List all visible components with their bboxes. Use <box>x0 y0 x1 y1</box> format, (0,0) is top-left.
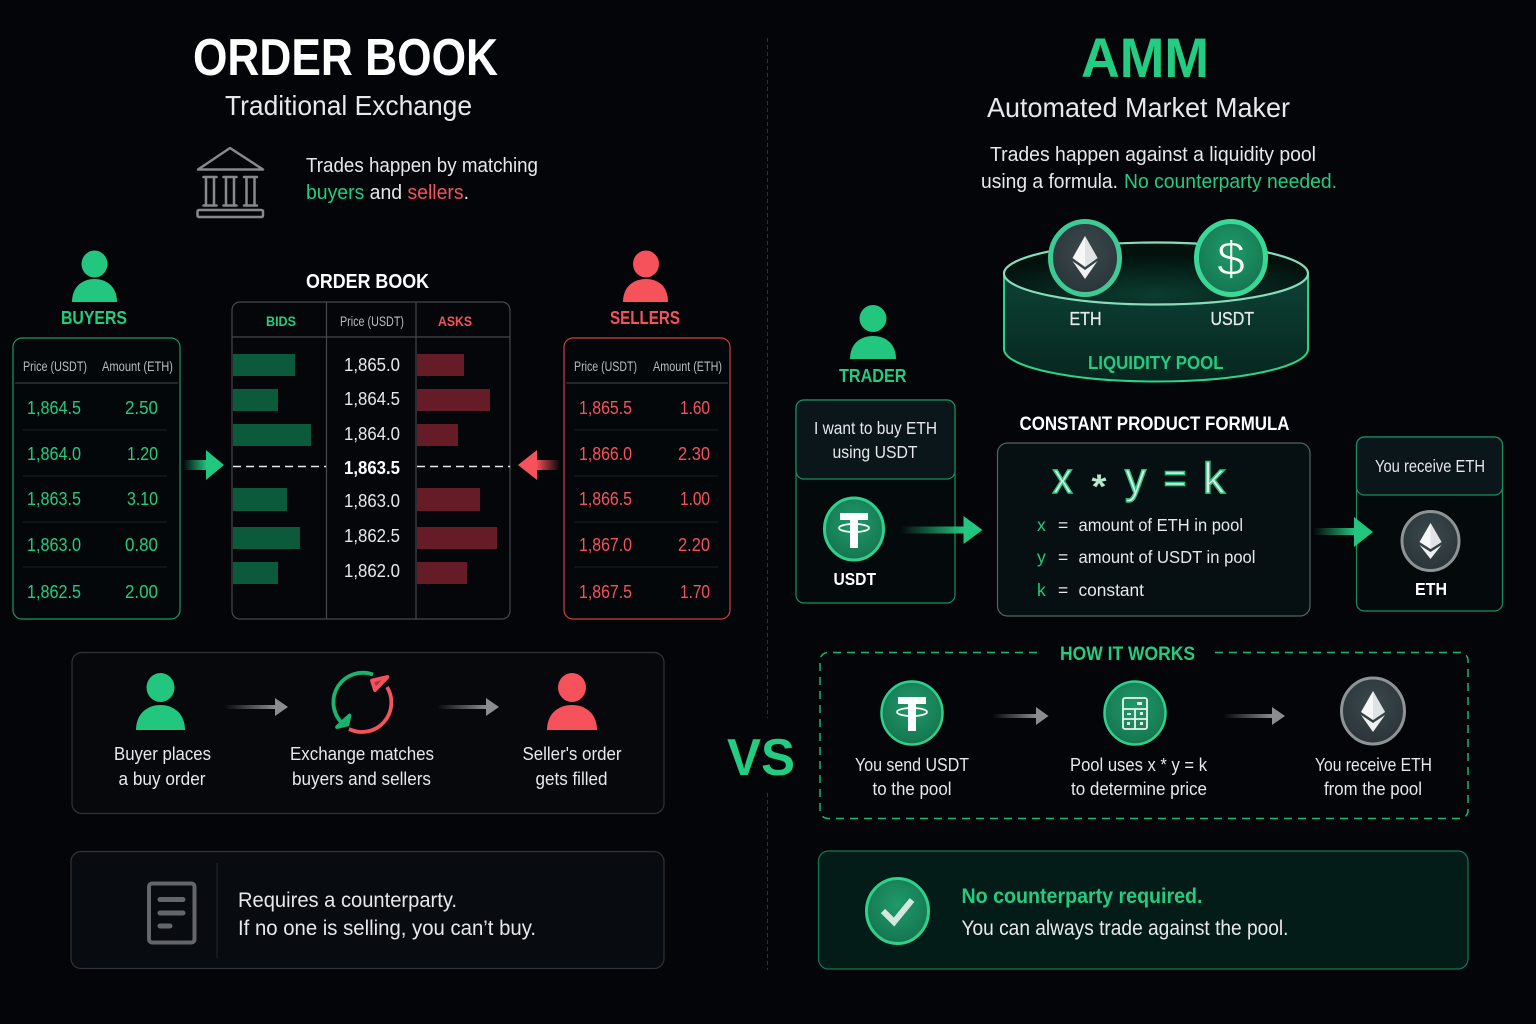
legend: y: amount of USDT in pool <box>1078 547 1256 567</box>
icon: eth coin <box>1342 678 1404 744</box>
icon: eth coin <box>1050 222 1120 294</box>
label: trader: TRADER <box>839 366 906 386</box>
text: step send <box>855 755 969 799</box>
header: bids: BIDS <box>266 313 296 329</box>
arrow: step 2 to 3 <box>437 698 499 716</box>
panel: order book steps <box>72 652 664 814</box>
label: sellers: SELLERS <box>610 308 680 328</box>
panel: buyers table: 1,863.5 <box>27 489 81 509</box>
chart: bid depth bars <box>233 354 311 584</box>
panel: buyers table: 1,862.5 <box>27 582 81 602</box>
panel: sellers table: 1,867.5 <box>579 582 632 602</box>
text: step receive: from the pool <box>1324 779 1422 799</box>
text: seller step <box>522 744 622 789</box>
price ladder: 1,865.0 <box>344 355 400 375</box>
text: step receive <box>1315 755 1432 799</box>
text: step pool: to determine price <box>1071 779 1207 799</box>
price ladder: 1,863.5 <box>344 458 400 478</box>
panel: sellers table: 2.30 <box>678 444 710 464</box>
panel: buyers table: 1.20 <box>127 444 158 464</box>
text: buyer step: Buyer places <box>114 744 211 764</box>
text: buyers and sellers: buyers and sellers. <box>306 181 469 204</box>
panel: sellers table: 1,866.0 <box>579 444 632 464</box>
diagram: liquidity pool <box>1004 222 1308 382</box>
panel: sellers table: Amount (ETH) <box>653 359 722 374</box>
icon: usdt coin <box>882 682 942 744</box>
icon: usdt dollar coin: $ <box>1217 233 1245 286</box>
icon: calculator coin <box>1104 682 1166 744</box>
icon: buyer <box>136 673 185 730</box>
text: you receive eth: You receive ETH <box>1375 456 1485 476</box>
text: seller step: Seller's order <box>522 744 622 764</box>
text: no counterparty required: No counterparty required. <box>962 885 1202 908</box>
icon: seller <box>547 673 597 730</box>
text: step receive: You receive ETH <box>1315 755 1432 775</box>
panel: order book table <box>232 302 510 619</box>
arrow: step 2 to 3 <box>1223 707 1285 725</box>
panel: buyers table: 0.80 <box>125 535 158 555</box>
panel: buyers table: 1,864.5 <box>27 398 81 418</box>
legend: k: = <box>1058 580 1068 600</box>
header: asks: ASKS <box>438 313 472 329</box>
text: buyer step: a buy order <box>118 769 206 789</box>
price ladder: 1,862.0 <box>344 561 400 581</box>
panel: buyers table: 1,864.0 <box>27 444 81 464</box>
legend: x: amount of ETH in pool <box>1078 515 1243 535</box>
text: counterparty note: If no one is selling, you can’t buy. <box>238 917 536 940</box>
title: order book: ORDER BOOK <box>193 29 498 87</box>
panel: sellers table <box>564 338 730 619</box>
price ladder: 1,863.0 <box>344 491 400 511</box>
panel: buyers table: Amount (ETH) <box>102 359 173 374</box>
subtitle: traditional exchange: Traditional Exchange <box>225 90 472 121</box>
text: against a pool: Trades happen against a liquidity pool <box>990 143 1316 166</box>
arrow: step 1 to 2 <box>992 707 1048 725</box>
legend: k: k <box>1037 580 1046 600</box>
panel: trader request <box>796 400 955 603</box>
panel: buyers table: Price (USDT) <box>23 359 87 374</box>
panel: sellers table: Price (USDT) <box>574 359 637 374</box>
icon: matching cycle <box>333 673 391 732</box>
arrow: buyers to book <box>183 450 224 480</box>
text: step pool <box>1070 755 1208 799</box>
formula: x y k <box>1052 454 1226 506</box>
panel: sellers table: 1.00 <box>680 489 710 509</box>
chart: ask depth bars <box>417 354 497 584</box>
panel: buyers table <box>13 338 180 619</box>
panel: sellers table: 1,865.5 <box>579 398 632 418</box>
legend: k: constant <box>1078 580 1144 600</box>
text: seller step: gets filled <box>536 769 608 789</box>
legend: y: = <box>1058 547 1068 567</box>
formula: x y k: = <box>1164 454 1186 503</box>
price ladder: 1,864.5 <box>344 389 400 409</box>
panel: how it works <box>820 644 1468 818</box>
label: buyers: BUYERS <box>61 308 127 328</box>
text: trade against pool: You can always trade against the pool. <box>962 917 1288 940</box>
arrow: trader to formula <box>900 516 982 544</box>
callout: requires counterparty <box>71 852 664 968</box>
panel: buyers table: 1,863.0 <box>27 535 81 555</box>
arrow: step 1 to 2 <box>224 698 288 716</box>
icon: usdt dollar coin <box>1196 222 1266 294</box>
panel: sellers table: 1,866.5 <box>579 489 632 509</box>
icon: trader person <box>850 305 896 359</box>
icon: sellers person <box>623 250 668 302</box>
text: exchange step <box>290 744 434 789</box>
text: step send: You send USDT <box>855 755 969 775</box>
formula: x y k: * <box>1092 468 1107 506</box>
header: price: Price (USDT) <box>340 314 404 329</box>
icon: usdt coin <box>824 498 884 560</box>
label: versus: VS <box>727 729 795 787</box>
subtitle: automated market maker: Automated Market Maker <box>987 92 1290 123</box>
text: trades by matching: Trades happen by matching <box>306 154 538 177</box>
text: against a pool: No counterparty needed. <box>1124 170 1337 193</box>
panel: buyers table: 3.10 <box>127 489 158 509</box>
formula: x y k: x <box>1052 454 1072 503</box>
icon: eth coin <box>1402 512 1459 570</box>
text: trader intent: using USDT <box>832 442 918 462</box>
price ladder: 1,864.0 <box>344 424 400 444</box>
icon: buyers person <box>72 250 117 302</box>
heading: order book table: ORDER BOOK <box>306 271 429 293</box>
price ladder <box>344 355 400 581</box>
text: counterparty note: Requires a counterparty. <box>238 889 457 912</box>
legend: x: = <box>1058 515 1068 535</box>
formula: x y k: y <box>1125 454 1146 503</box>
panel: buyers table: 2.00 <box>125 582 158 602</box>
callout: no counterparty <box>818 851 1468 969</box>
label: eth: ETH <box>1415 579 1447 599</box>
panel: receive eth <box>1356 437 1502 611</box>
icon: document <box>149 884 194 942</box>
text: counterparty note <box>238 889 536 940</box>
formula: x y k: k <box>1203 454 1226 503</box>
icon: bank building <box>198 148 263 217</box>
legend: k <box>1037 580 1144 600</box>
panel: buyers table: 2.50 <box>125 398 158 418</box>
panel: formula <box>998 443 1310 616</box>
section: order book header <box>193 29 538 217</box>
panel: sellers table: 1,867.0 <box>579 535 632 555</box>
price ladder: 1,862.5 <box>344 526 400 546</box>
text: exchange step: Exchange matches <box>290 744 434 764</box>
icon: check <box>866 878 928 944</box>
label: liquidity pool: LIQUIDITY POOL <box>1088 353 1224 373</box>
panel: sellers table: 2.20 <box>678 535 710 555</box>
section: amm header <box>981 26 1337 193</box>
text: buyer step <box>114 744 211 789</box>
panel: sellers table: 1.70 <box>680 582 710 602</box>
text: against a pool <box>981 143 1337 193</box>
heading: how it works: HOW IT WORKS <box>1060 644 1195 665</box>
text: step send: to the pool <box>872 779 952 799</box>
text: trader intent: I want to buy ETH <box>814 418 937 438</box>
label: eth: ETH <box>1070 309 1102 329</box>
label: usdt: USDT <box>834 569 876 589</box>
text: against a pool: using a formula. <box>981 170 1118 193</box>
text: exchange step: buyers and sellers <box>292 769 431 789</box>
text: trader intent <box>814 418 937 462</box>
legend: y: y <box>1037 547 1046 567</box>
arrow: formula to result <box>1313 517 1373 547</box>
heading: constant product formula: CONSTANT PRODUCT FORMULA <box>1020 414 1290 435</box>
arrow: sellers to book <box>518 450 560 480</box>
text: step pool: Pool uses x * y = k <box>1070 755 1208 775</box>
label: usdt: USDT <box>1210 309 1254 329</box>
panel: sellers table: 1.60 <box>680 398 710 418</box>
legend: x: x <box>1037 515 1046 535</box>
title: amm: AMM <box>1081 26 1209 89</box>
